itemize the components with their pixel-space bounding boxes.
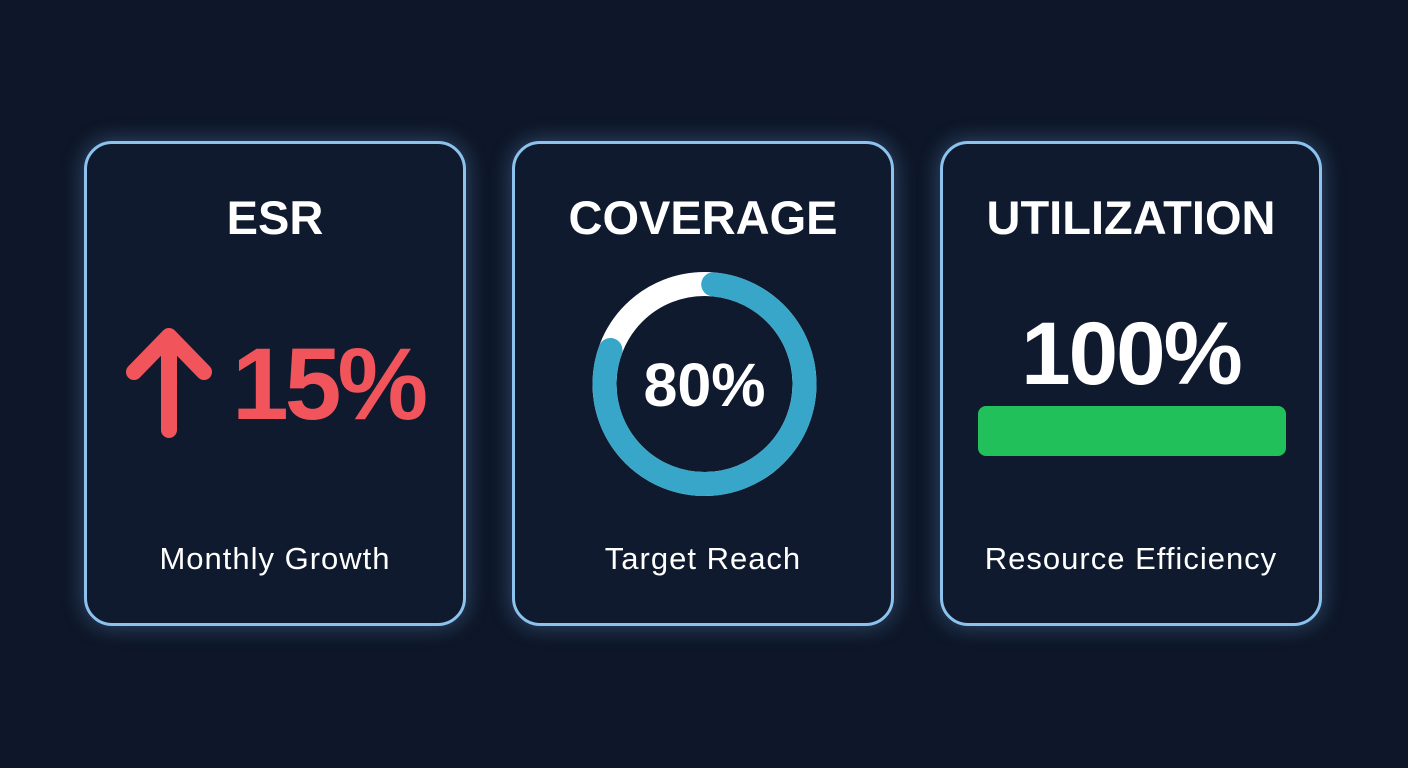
donut chart: 80%	[592, 272, 816, 496]
panel: ESR	[84, 141, 466, 626]
stat: 15%: 15%	[232, 327, 424, 441]
label: Monthly Growth: Monthly Growth	[159, 541, 391, 576]
panel: coverage	[512, 141, 894, 626]
heading: COVERAGE: COVERAGE	[568, 191, 838, 244]
stat: 100%: 100%	[1021, 303, 1241, 403]
panel: utilization	[940, 141, 1322, 626]
donut chart: 80%: 80%	[643, 351, 766, 419]
heading: UTILIZATION: UTILIZATION	[987, 191, 1275, 244]
icon: up arrow	[126, 328, 212, 438]
heading: ESR: ESR	[227, 191, 323, 244]
progress bar	[978, 406, 1286, 456]
label: Resource Efficiency: Resource Efficiency	[985, 541, 1277, 576]
label: Target Reach: Target Reach	[605, 541, 801, 576]
